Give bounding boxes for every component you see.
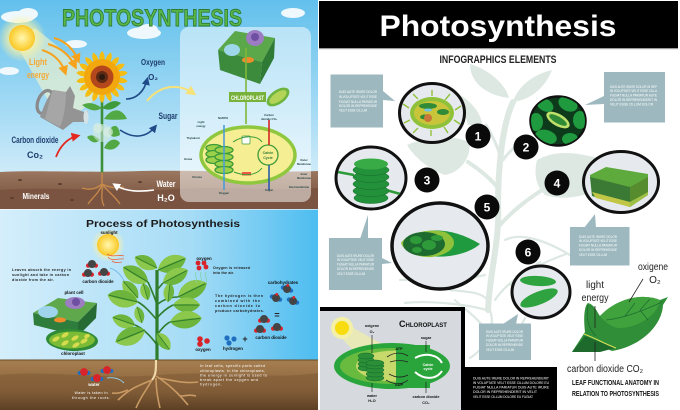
callout box: 2: FUGIAT NULLA PARIATUR AUTE (610, 94, 658, 98)
label: water H2O: Water (156, 179, 176, 189)
callout box: 1: VELIT ESSE CILLUM (339, 108, 367, 112)
molecules: carbon dioxide right (254, 315, 283, 333)
caption: leaf functional anatomy: LEAF FUNCTIONAL ANATOMY IN (572, 380, 659, 387)
title banner (319, 1, 678, 49)
number badge 2 (514, 134, 538, 160)
black text box: VELIT ESSE CILLUM DOLORE EU FUGIAT (473, 395, 533, 399)
labels: chloroplast diagram: Sugar (265, 188, 274, 192)
text block: chloroplasts: break apart the oxygen and (200, 378, 258, 382)
labels: chloroplast diagram: Inner (301, 172, 308, 176)
callout box: 1: DUIS AUTE IRURE DOLOR (339, 90, 377, 94)
molecules: water (78, 366, 113, 382)
number badge 1: 1 (475, 130, 482, 144)
text block: leaves absorb (12, 268, 72, 282)
callout box: 5: DOLOR IN REPREHENDE (337, 267, 375, 271)
callout box: 2: DUIS AUTE IRURE DOLOR IN REP (610, 85, 658, 89)
icon: chloroplast small (263, 84, 293, 110)
label: sugar: Sugar (158, 111, 178, 121)
number badge 3 (414, 168, 440, 192)
text block: chloroplasts: the energy in sunlight is used to (200, 374, 267, 378)
molecules: carbohydrates (270, 284, 299, 305)
plant: leafy plant (106, 250, 210, 360)
text block: water taken in: through the roots. (72, 396, 110, 400)
callout box: 1 (330, 74, 395, 128)
plant: roots (82, 172, 124, 206)
callout box: 6: VELIT ESSE CILLUM (486, 348, 514, 352)
molecule: oxygen lower (197, 336, 210, 347)
label: oxygen O2 (141, 57, 165, 82)
circle 2: chloroplast cells (529, 93, 587, 147)
callout box: 5: FUGIAT NULLA PARIATUR (337, 262, 374, 266)
diagram: chloroplast ellipse: cycle (424, 367, 432, 371)
diagram: chloroplast cross-section: Calvin (263, 151, 273, 155)
callout box: 6: DUIS AUTE IRURE DOLOR (486, 330, 523, 334)
label: plant cell: plant cell (64, 290, 84, 295)
labels: chloroplast inputs and outputs: O₂ (370, 330, 375, 334)
labels: chloroplast inputs and outputs: water (366, 394, 377, 398)
panel: photosynthesis diagram with sunflower (0, 0, 318, 209)
title banner: Photosynthesis (380, 10, 616, 43)
label: oxigene O2: O₂ (649, 275, 661, 286)
callout box: 4 (570, 214, 630, 266)
labels: chloroplast diagram: Oxygen (219, 191, 229, 195)
callout box: 5: DUIS AUTE IRURE DOLOR (337, 254, 374, 258)
number badge 5 (474, 194, 500, 220)
arrow: oxygen (126, 80, 147, 99)
arrow: water to root (107, 378, 124, 383)
labels: chloroplast diagram: Outer (300, 158, 309, 162)
number badge 3: 3 (424, 174, 431, 188)
callout box: 6: DOLOR IN REPREHENDE (486, 343, 524, 347)
label: oxigene O2: oxigene (638, 262, 668, 273)
label: carbon dioxide: carbon dioxide (82, 279, 114, 284)
label: carbohydrates: carbohydrates (268, 280, 299, 285)
text block: hydrogen: The hydrogen is then (215, 294, 264, 298)
circle 3: thylakoid stack (336, 147, 406, 209)
plant: sunflower (76, 51, 128, 173)
text block: oxygen released: Oxygen is released (213, 266, 251, 270)
number badge 1 (466, 124, 490, 148)
text block: chloroplasts: hydrogen. (200, 382, 222, 386)
arrow: oxigene (629, 279, 643, 302)
text block: leaves absorb: sunlight and take in carbon (12, 273, 70, 277)
illustration: leaf anatomy (572, 297, 668, 352)
number badge 4 (544, 170, 570, 196)
labels: chloroplast diagram: Light (198, 120, 204, 124)
labels: chloroplast inputs and outputs: CO₂ (422, 401, 430, 405)
labels: chloroplast diagram: Stroma (192, 175, 202, 179)
labels: chloroplast diagram: Membrane (297, 162, 311, 166)
icon: plant cell cube (218, 30, 275, 84)
labels: chloroplast diagram: NADPH (218, 116, 228, 120)
panel: chloroplast detail (147, 27, 311, 202)
symbol: plus: + (242, 334, 248, 344)
icon: sun and beam (331, 317, 384, 362)
title: Process of Photosynthesis (86, 219, 241, 230)
labels: chloroplast diagram (184, 113, 311, 195)
caption: leaf functional anatomy (572, 380, 659, 398)
icon: sun with rays (91, 228, 125, 263)
labels: chloroplast diagram: Intermembrane (289, 185, 310, 189)
diagram: chloroplast ellipse: Calvin (423, 363, 433, 367)
illustration: pale tree (400, 64, 597, 358)
callout box: 4: FUGIAT NULLA PARIATUR (579, 244, 617, 248)
labels: chloroplast inputs and outputs: ATP (395, 347, 403, 351)
label: light energy (582, 280, 608, 304)
arrow: light energy (594, 306, 596, 328)
label: carbon dioxide: Co₂ (27, 150, 43, 160)
labels: chloroplast diagram: Thylakoid (186, 136, 200, 140)
molecule: oxygen with wavy lines (195, 261, 208, 283)
label: oxygen: oxygen (196, 256, 212, 261)
text block: chloroplasts: In leaf cells, specific parts called (200, 364, 265, 368)
label: water H2O: H₂O (157, 193, 175, 203)
label: light energy: energy (582, 293, 608, 304)
label: water: water (87, 382, 100, 387)
number badge 5: 5 (484, 200, 491, 214)
arrows: sunlight rays (42, 38, 78, 72)
arrow: carbon dioxide (594, 342, 596, 361)
clouds (0, 8, 305, 75)
heading: chloroplast: Chloroplast (399, 319, 447, 329)
circle 6: chloroplasts (512, 266, 570, 318)
black text box: DOLOR IN REPREHENDERIT IN VELIT (473, 390, 537, 394)
labels: chloroplast inputs and outputs: H₂O (368, 399, 376, 403)
number badge 2: 2 (523, 140, 530, 154)
labels: chloroplast inputs and outputs: oxigene (365, 324, 379, 328)
circle 5: chloroplast (392, 203, 488, 289)
labels: chloroplast inputs and outputs: ADP (395, 383, 403, 387)
callout box: 4: DUIS AUTE IRURE DOLOR (579, 235, 617, 239)
arrow: carbon dioxide red (56, 136, 77, 157)
callout box: 5: VELIT ESSE CILLUM (337, 272, 365, 276)
label: chloroplast (229, 92, 266, 102)
label: light energy (27, 57, 49, 80)
callout box: 4: IN VOLUPTATE VELIT ESSE (579, 239, 618, 243)
label: oxygen lower: oxygen (195, 347, 211, 352)
panel: process of photosynthesis (0, 210, 318, 410)
icon: plant cell (33, 297, 97, 336)
diagram: chloroplast cross-section (201, 120, 295, 190)
callout box: 5 (329, 215, 392, 290)
callout box: 4: VELIT ESSE CILLUM (579, 253, 607, 257)
panel: infographics elements (319, 1, 678, 410)
callout box: 2: IN VOLUPTATE VELIT ESSE CILLU (610, 89, 657, 93)
plant: roots (112, 360, 198, 408)
callout box: 6: IN VOLUPTATE VELIT ESSE (486, 334, 524, 338)
labels: chloroplast inputs and outputs: carbon dioxide (412, 395, 440, 399)
circle 4: leaf tissue block (584, 152, 658, 212)
number badge 6: 6 (525, 246, 532, 260)
diagram: chloroplast cross-section: Cycle (263, 156, 273, 160)
callout box: 6 (479, 314, 531, 360)
text block: oxygen released (213, 266, 251, 275)
text block: chloroplasts (200, 364, 267, 386)
molecules: carbon dioxide (82, 260, 110, 277)
label: carbon dioxide right: carbon dioxide (255, 335, 287, 340)
text block: hydrogen: produce carbohydrates. (215, 309, 264, 313)
arrow: co2 into leaf (110, 268, 125, 284)
callout box: 1: FUGIAT NULLA PARIATUR (339, 100, 377, 104)
text block: oxygen released: into the air. (213, 271, 234, 275)
callout box: 5: IN VOLUPTATE VELIT ESSE (337, 258, 375, 262)
label: carbon dioxide (12, 135, 58, 160)
text block: water taken in: Water is taken in (74, 391, 108, 395)
soil ground (0, 171, 318, 209)
labels: chloroplast diagram: Grana (184, 157, 192, 161)
icon: watering can (34, 86, 88, 130)
labels: chloroplast inputs and outputs: sugar (421, 336, 432, 340)
soil ground (0, 360, 318, 410)
arrow: yellow sunlight (147, 87, 193, 101)
labels: chloroplast diagram: Carbon (264, 113, 274, 117)
label: chloroplast: chloroplast (61, 351, 85, 356)
arrow: cell to chloroplast (245, 48, 247, 124)
callout box: 1: DOLOR IN REPREHENDE (339, 104, 378, 108)
labels: chloroplast diagram: Membrane (297, 176, 311, 180)
callout box: 4: DOLOR IN REPREHENDE (579, 248, 618, 252)
label: water H2O (156, 179, 176, 203)
circle 1: plant cell (400, 84, 464, 142)
black text box: FUGIAT NULLA PARIATUR DUIS AUTE IRURE (473, 386, 550, 390)
panel: chloroplast box (320, 307, 465, 410)
black text box (465, 367, 557, 410)
arrow: sugar (120, 127, 155, 136)
number badge 4: 4 (554, 176, 561, 190)
label: light energy: light (586, 280, 604, 291)
label: light energy: energy (27, 70, 49, 80)
label: oxigene O2 (638, 262, 668, 286)
text block: water taken in (72, 391, 110, 400)
title: PHOTOSYNTHESIS: PHOTOSYNTHESIS (62, 5, 242, 32)
icon: chloroplast (45, 328, 99, 352)
labels: chloroplast diagram: dioxide CO₂ (261, 117, 278, 121)
callout box: 2 (585, 72, 665, 122)
label: oxygen O2: O₂ (148, 73, 158, 82)
arrow: water (115, 185, 154, 191)
symbol: equals: = (274, 310, 280, 320)
label: oxygen O2: Oxygen (141, 57, 165, 67)
callout box: 2: VELIT ESSE CILLUM DOLOR (610, 102, 654, 106)
label: sunlight: sunlight (100, 230, 118, 235)
icon: sun with light beam (0, 14, 110, 125)
molecule: hydrogen (224, 335, 237, 346)
text block: chloroplasts: chloroplasts. In the chloroplasts, (200, 369, 265, 373)
text block: hydrogen (215, 294, 264, 313)
subtitle: INFOGRAPHICS ELEMENTS (440, 54, 556, 66)
label: carbon dioxide CO2: carbon dioxide CO₂ (567, 364, 643, 375)
label: hydrogen: hydrogen (223, 346, 243, 351)
label: minerals: Minerals (22, 191, 50, 201)
label: chloroplast: CHLOROPLAST (231, 96, 264, 102)
number badge 6 (516, 240, 540, 264)
labels: chloroplast diagram: energy (196, 124, 206, 128)
text block: hydrogen: combined with the (215, 299, 260, 303)
diagram: chloroplast ellipse (334, 343, 450, 389)
text block: hydrogen: carbon dioxide to (215, 304, 261, 308)
callout box: 2: DOLOR IN REPREHENDERIT IN (610, 98, 658, 102)
black text box: DUIS AUTE IRURE DOLOR IN REPREHENDERIT (473, 376, 549, 380)
labels: chloroplast inputs and outputs (365, 324, 440, 405)
label: light energy: Light (29, 57, 47, 67)
text block: leaves absorb: dioxide from the air. (12, 278, 54, 282)
callout box: 1: IN VOLUPTATE VELIT ESSE (339, 95, 378, 99)
callout box: 6: FUGIAT NULLA PARIATUR (486, 338, 523, 342)
text block: leaves absorb: Leaves absorb the energy in (12, 268, 72, 272)
black text box: IN VOLUPTATE VELIT ESSE CILLUM DOLORE EU (473, 381, 550, 385)
label: carbon dioxide: Carbon dioxide (12, 135, 58, 145)
